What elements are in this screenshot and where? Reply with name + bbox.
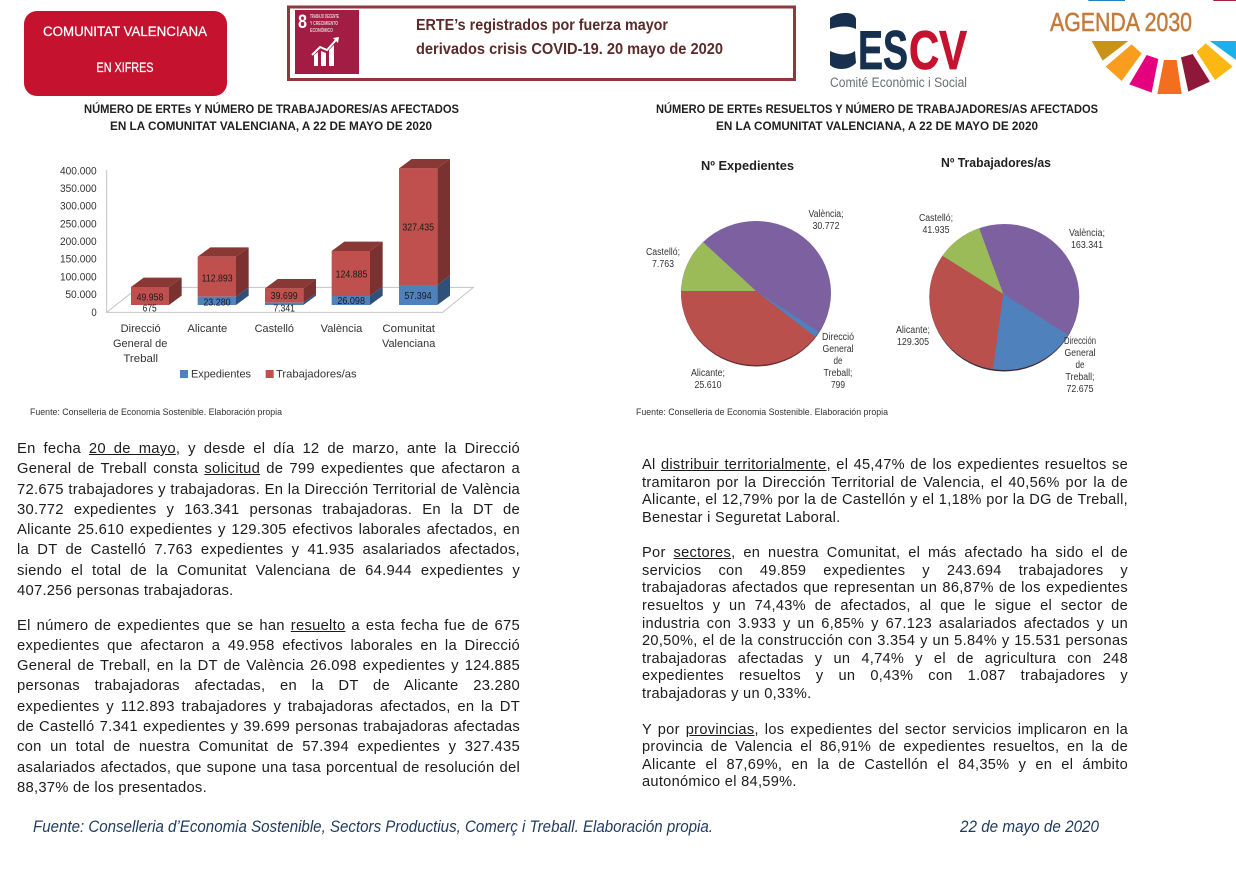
badge: Comunitat Valenciana en xifres	[24, 11, 227, 96]
badge: Comunitat Valenciana en xifres: EN XIFRES	[96, 60, 154, 75]
text block: provincias: autonómico el 84,59%.	[642, 774, 797, 790]
text block: resueltos: de Castelló 7.341 expedientes y 39.699 personas trabajadoras afectadas	[17, 719, 520, 735]
text block: provincias: Y por provincias, los expedientes del sector servicios implicaron en la	[642, 722, 1128, 738]
y axis labels: 200.000	[60, 236, 97, 248]
pie chart: Nº Trabajadores/as: Treball;	[1066, 372, 1094, 383]
footer source: Fuente: Conselleria d’Economia Sostenible, Sectors Productius, Comerç i Treball. Elaboración propia.	[33, 818, 713, 836]
header box with title: derivados crisis COVID-19. 20 mayo de 2020	[416, 41, 723, 58]
text block: sectores: industria con 3.933 y un 6,85% y 67.123 asalariados afectados y un	[642, 616, 1128, 632]
data labels: 23.280	[203, 297, 231, 308]
pie chart: Nº Trabajadores/as: Alicante;	[896, 325, 930, 336]
bar: València	[332, 242, 383, 305]
pie chart: Nº Trabajadores/as: General	[1064, 348, 1096, 359]
category labels: Direcció	[121, 323, 161, 335]
text block: solicitudes: En fecha 20 de mayo, y desde el día 12 de marzo, ante la Direcció	[17, 441, 520, 457]
text block: distribución territorial: Al distribuir territorialmente, el 45,47% de los expedientes resueltos se	[642, 457, 1128, 473]
logo: CES CV: ES	[858, 19, 908, 81]
logo: CES CV: CV	[909, 19, 967, 81]
y axis labels: 50.000	[65, 289, 97, 301]
text block: sectores: Por sectores, en nuestra Comunitat, el más afectado ha sido el de	[642, 545, 1128, 561]
pie chart: Nº Expedientes: de	[834, 356, 843, 367]
icon: SDG 8	[295, 10, 359, 74]
text block: sectores: trabajadoras afectadas y un 4,74% y el de agricultura con 248	[642, 651, 1128, 667]
header box with title	[288, 7, 794, 80]
data labels: 675	[143, 303, 157, 314]
text block: resueltos: El número de expedientes que se han resuelto a esta fecha fue de 675	[17, 618, 520, 634]
text block: resueltos: personas trabajadoras afectadas, en la DT de Alicante 23.280	[17, 678, 520, 694]
text block: provincias: Alicante el 87,69%, en la de Castellón el 84,35% y en el ámbito	[642, 757, 1128, 773]
pie chart: Nº Trabajadores/as: 41.935	[922, 225, 950, 236]
pie chart: Nº Expedientes: Treball;	[824, 368, 852, 379]
category labels: General de	[113, 338, 167, 350]
legend: Expedientes	[191, 368, 251, 380]
text block: solicitudes	[17, 441, 520, 599]
pie chart: Nº Trabajadores/as: València;	[1069, 228, 1105, 239]
data labels	[137, 222, 434, 314]
text block: distribución territorial	[642, 457, 1128, 526]
text block: solicitudes: 407.256 personas trabajadoras.	[17, 583, 233, 599]
data labels: 49.958	[137, 293, 164, 304]
data labels: 124.885	[336, 269, 368, 280]
y axis labels	[60, 165, 97, 319]
bar: Castelló	[265, 279, 316, 305]
pie chart: Nº Expedientes: Alicante;	[691, 368, 725, 379]
pie chart: Nº Expedientes: 7.763	[652, 259, 674, 270]
category labels: Treball	[123, 353, 158, 365]
pie chart: Nº Expedientes: 25.610	[694, 380, 722, 391]
pie chart: Nº Expedientes: General	[822, 344, 854, 355]
text block: sectores: resueltos y un 74,43% de afectados, al que le sigue el sector de	[642, 598, 1128, 614]
y axis labels: 300.000	[60, 201, 97, 213]
category labels: Castelló	[255, 323, 294, 335]
pie chart: Nº Trabajadores/as: 129.305	[897, 337, 929, 348]
data labels: 57.394	[404, 291, 432, 302]
pie chart: Nº Trabajadores/as: de	[1076, 360, 1085, 371]
text block: sectores: expedientes resueltos y un 0,43% con 1.087 trabajadores y	[642, 668, 1128, 684]
pie chart: Nº Expedientes: Castelló;	[646, 247, 680, 258]
pie chart: Nº Expedientes: Nº Expedientes	[701, 158, 794, 173]
bar: Direcció General de Treball	[131, 278, 182, 305]
icon: SDG 8: 8	[298, 12, 307, 33]
data labels: 26.098	[337, 296, 365, 307]
category labels: Comunitat	[382, 323, 435, 335]
pie chart: Nº Trabajadores/as: 163.341	[1071, 240, 1103, 251]
text block: sectores: trabajadoras y un 0,33%.	[642, 686, 811, 702]
data labels: 39.699	[271, 291, 298, 302]
text block: solicitudes: la DT de Castelló 7.763 expedientes y 41.935 asalariados afectados,	[17, 542, 520, 558]
pie chart: Nº Expedientes: València;	[808, 209, 844, 220]
heading: right charts: EN LA COMUNITAT VALENCIANA, A 22 DE MAYO DE 2020	[716, 119, 1038, 133]
pie chart: Nº Expedientes: 30.772	[812, 221, 840, 232]
text block: provincias	[642, 722, 1128, 790]
text block: resueltos: asalariados afectados, que supone una tasa porcentual de resolución del	[17, 760, 520, 776]
heading: right charts	[656, 101, 1098, 133]
icon: SDG 8: Y CRECIMIENTO	[310, 21, 338, 27]
legend: Trabajadores/as	[276, 368, 357, 380]
heading: left chart: EN LA COMUNITAT VALENCIANA, A 22 DE MAYO DE 2020	[110, 119, 432, 133]
data labels: 327.435	[402, 222, 434, 233]
heading: left chart: NÚMERO DE ERTEs Y NÚMERO DE TRABAJADORES/AS AFECTADOS	[84, 101, 459, 116]
text block: solicitudes: Alicante 25.610 expedientes y 129.305 efectivos laborales afectados, en	[17, 522, 520, 538]
bar: Comunitat Valenciana	[399, 159, 450, 305]
text block: distribución territorial: Alicante, el 12,79% por la de Castellón y el 1,18% por la DG de Treball,	[642, 492, 1128, 508]
text block: resueltos: con un total de nuestra Comunitat de 57.394 expedientes y 327.435	[17, 739, 520, 755]
text block: sectores: servicios con 49.859 expedientes y 243.694 trabajadores y	[642, 563, 1128, 579]
text block: resueltos: expedientes que afectaron a 49.958 efectivos laborales en la Direcció	[17, 638, 520, 654]
badge: Comunitat Valenciana en xifres: COMUNITAT VALENCIANA	[43, 24, 207, 39]
category labels: Valenciana	[382, 338, 436, 350]
text block: sectores	[642, 545, 1128, 702]
text block: resueltos: General de Treball, en la DT de València 26.098 expedientes y 124.885	[17, 658, 520, 674]
text block: sectores: 20,50%, el de la construcción con 3.354 y un 5.84% y 15.531 personas	[642, 633, 1128, 649]
text block: resueltos: 88,37% de los presentados.	[17, 780, 207, 796]
text block: solicitudes: 30.772 expedientes y 163.341 personas trabajadoras. En la DT de	[17, 502, 520, 518]
y axis labels: 0	[91, 307, 97, 319]
heading: right charts: NÚMERO DE ERTEs RESUELTOS Y NÚMERO DE TRABAJADORES/AS AFECTADOS	[656, 101, 1098, 116]
pie chart: Nº Trabajadores/as: Dirección	[1064, 336, 1096, 347]
data labels: 112.893	[202, 274, 233, 285]
pie chart: Nº Trabajadores/as: Castelló;	[919, 213, 953, 224]
header box with title: ERTE’s registrados por fuerza mayor	[416, 17, 668, 34]
text block: provincias: provincia de Valencia el 86,91% de expedientes resueltos, en la de	[642, 739, 1128, 755]
category labels: Alicante	[187, 323, 227, 335]
y axis labels: 400.000	[60, 165, 97, 177]
pie chart: Nº Trabajadores/as	[896, 158, 1104, 392]
footer date: 22 de mayo de 2020	[959, 818, 1100, 836]
logo: CES CV: Comité Econòmic i Social	[830, 75, 967, 90]
pie chart: Nº Expedientes: 799	[831, 380, 845, 391]
text block: solicitudes: General de Treball consta solicitud de 799 expedientes que afectaron a	[17, 461, 520, 477]
text block: resueltos	[17, 618, 520, 796]
source note: right charts: Fuente: Conselleria de Economia Sostenible. Elaboración propia	[636, 407, 888, 417]
data labels: 7.341	[273, 303, 295, 314]
text block: distribución territorial: Benestar i Seguretat Laboral.	[642, 510, 841, 526]
legend	[180, 368, 357, 380]
pie chart: Nº Expedientes: Direcció	[822, 332, 854, 343]
category labels: València	[321, 323, 363, 335]
bar chart: expedientes y trabajadores	[60, 159, 473, 380]
y axis labels: 250.000	[60, 218, 97, 230]
text block: sectores: trabajadoras afectados que representan un 86,87% de los expedientes	[642, 580, 1128, 596]
heading: left chart	[84, 101, 459, 133]
pie chart: Nº Expedientes	[646, 160, 854, 388]
source note: left chart: Fuente: Conselleria de Economia Sostenible. Elaboración propia	[30, 407, 282, 417]
y axis labels: 350.000	[60, 183, 97, 195]
icon: SDG 8: ECONÓMICO	[310, 26, 333, 34]
y axis labels: 100.000	[60, 271, 97, 283]
bar: Alicante	[198, 247, 249, 305]
pie chart: Nº Trabajadores/as: 72.675	[1066, 384, 1094, 395]
y axis labels: 150.000	[60, 254, 97, 266]
pie chart: Nº Trabajadores/as: Nº Trabajadores/as	[941, 155, 1051, 170]
text block: distribución territorial: tramitaron por la Dirección Territorial de Valencia, el 40,56% por la de	[642, 475, 1128, 491]
text block: solicitudes: 72.675 trabajadores y trabajadoras. En la Dirección Territorial de València	[17, 482, 520, 498]
logo: Agenda 2030	[1050, 0, 1236, 94]
text block: solicitudes: siendo el total de la Comunitat Valenciana de 64.944 expedientes y	[17, 563, 520, 579]
icon: SDG 8: TRABAJO DECENTE	[310, 14, 339, 20]
category labels	[113, 323, 436, 365]
logo: CES CV	[830, 13, 967, 90]
text block: resueltos: expedientes y 112.893 trabajadores y trabajadoras afectados, en la DT	[17, 699, 520, 715]
logo: Agenda 2030: AGENDA 2030	[1050, 7, 1192, 37]
